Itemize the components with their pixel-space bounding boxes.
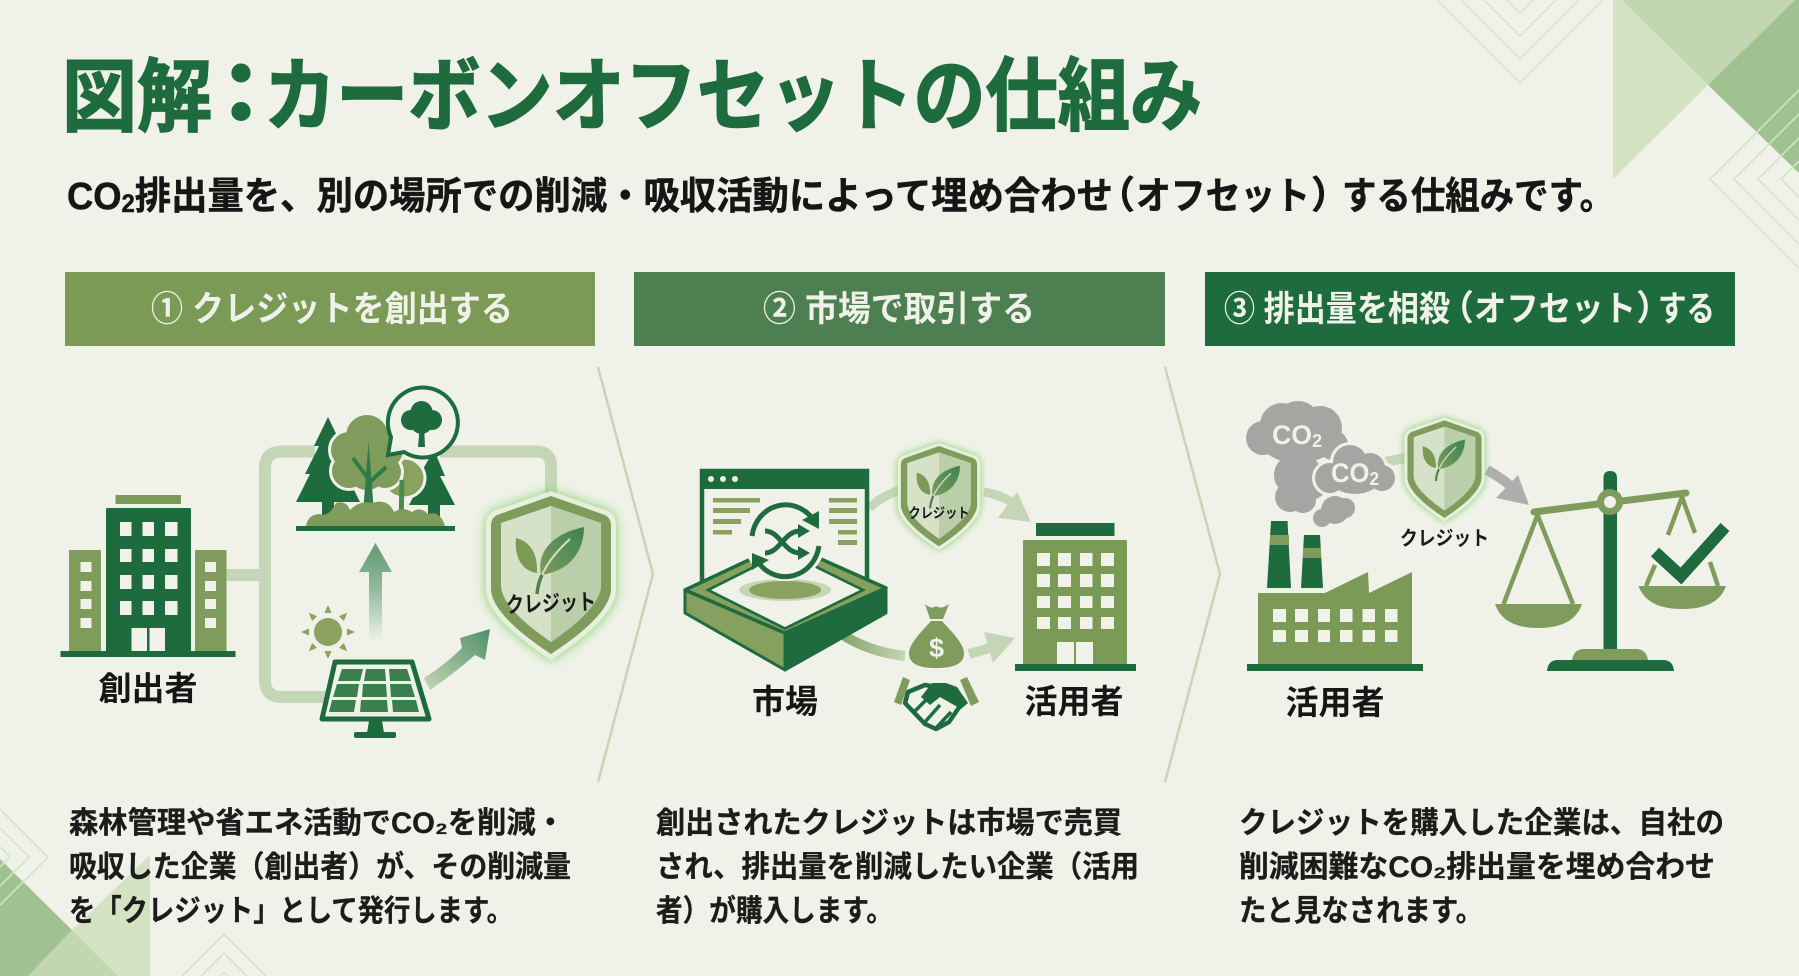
label: credit: クレジット bbox=[1400, 527, 1489, 550]
connector pipes bbox=[226, 452, 551, 697]
text block: step 2 description: 者）が購入します。 bbox=[656, 894, 893, 928]
step header 2: ② 市場で取引する bbox=[763, 290, 1035, 329]
icon: browser window bbox=[700, 469, 869, 596]
icon: credit shield bbox=[1404, 417, 1485, 522]
icon: credit shield large bbox=[486, 491, 616, 660]
text block: step 3 description: クレジットを購入した企業は、自社の bbox=[1239, 807, 1724, 840]
text block: step 1 description: を「クレジット」として発行します。 bbox=[69, 895, 513, 928]
icon: smoke clouds: 2 bbox=[1369, 469, 1379, 489]
icon: handshake bbox=[894, 677, 979, 729]
text block: step 1 description bbox=[69, 807, 571, 928]
text block: step 2 description: 創出されたクレジットは市場で売買 bbox=[656, 807, 1122, 840]
connector: cloud to shield bbox=[1385, 458, 1405, 462]
arrow: bag to user bbox=[969, 632, 1015, 663]
subtitle bbox=[67, 175, 1614, 218]
icon: factory bbox=[1247, 521, 1423, 671]
step header 3: ③ 排出量を相殺 bbox=[1224, 290, 1450, 329]
icon: credit shield: クレジット bbox=[908, 505, 970, 521]
icon: exchange circle bbox=[744, 499, 826, 581]
divider arrow 2 bbox=[1165, 367, 1220, 782]
panel: step 1 illustration bbox=[60, 388, 616, 738]
text block: step 3 description bbox=[1239, 807, 1724, 928]
icon: solar panel bbox=[322, 662, 429, 738]
step header 3 bbox=[1205, 272, 1735, 346]
subtitle: 2 bbox=[122, 190, 135, 218]
step header 1: ① クレジットを創出する bbox=[151, 290, 513, 329]
arrow: solar to forest bbox=[359, 543, 392, 642]
subtitle: CO bbox=[67, 176, 124, 218]
arrow: market payment to bag bbox=[843, 635, 905, 656]
title: カーボンオフセットの仕組み bbox=[264, 52, 1202, 141]
text block: step 2 description: され、排出量を削減したい企業（活用 bbox=[656, 851, 1139, 884]
icon: money bag: $ bbox=[929, 633, 944, 663]
icon: credit shield large: クレジット bbox=[506, 589, 596, 618]
step header 3: ） bbox=[1636, 289, 1671, 328]
step header 3: する bbox=[1658, 290, 1715, 329]
label: user: 活用者 bbox=[1024, 683, 1124, 720]
subtitle: ） bbox=[1311, 175, 1349, 217]
icon: tree bubble bbox=[388, 388, 458, 458]
arrow: credit to scale bbox=[1487, 470, 1529, 505]
text block: step 3 description: 削減困難なCO₂排出量を埋め合わせ bbox=[1239, 851, 1715, 884]
arrow: solar to credit bbox=[424, 629, 490, 690]
subtitle: オフセット bbox=[1136, 176, 1310, 218]
arrow: market to credit bbox=[869, 490, 900, 508]
icon: smoke clouds: CO bbox=[1331, 458, 1372, 488]
step header 3: （ bbox=[1439, 289, 1474, 328]
step header 1 bbox=[65, 272, 595, 346]
label: creator: 創出者 bbox=[98, 670, 198, 707]
icon: smoke clouds bbox=[1246, 401, 1395, 527]
icon: smoke clouds: CO bbox=[1272, 420, 1312, 450]
decoration: bottom left triangles bbox=[0, 809, 266, 976]
arrow: credit to user bbox=[984, 492, 1031, 522]
step header 2 bbox=[634, 272, 1165, 346]
icon: credit shield bbox=[898, 443, 980, 550]
icon: forest bbox=[296, 415, 455, 531]
text block: step 1 description: 吸収した企業（創出者）が、その削減量 bbox=[69, 850, 571, 884]
icon: balance scale bbox=[1495, 471, 1726, 671]
subtitle: する仕組みです。 bbox=[1342, 176, 1614, 218]
title: ： bbox=[201, 50, 281, 139]
icon: smoke clouds: 2 bbox=[1312, 431, 1322, 451]
label: user: 活用者 bbox=[1286, 684, 1384, 721]
text block: step 2 description bbox=[656, 807, 1139, 928]
text block: step 1 description: 森林管理や省エネ活動でCO₂を削減・ bbox=[69, 807, 565, 840]
icon: sun bbox=[301, 605, 355, 659]
panel: step 3 illustration bbox=[1246, 401, 1726, 721]
decoration: top right triangles bbox=[1437, 0, 1799, 268]
icon: creator building bbox=[60, 495, 236, 657]
icon: user building bbox=[1015, 523, 1136, 671]
divider arrow 1 bbox=[598, 367, 653, 782]
subtitle: 排出量を、別の場所での削減・吸収活動によって埋め合わせ bbox=[135, 176, 1113, 218]
title: 図解 bbox=[62, 53, 212, 142]
subtitle: （ bbox=[1097, 175, 1135, 217]
label: market: 市場 bbox=[752, 683, 818, 720]
text block: step 3 description: たと見なされます。 bbox=[1239, 895, 1483, 928]
icon: market platform bbox=[685, 543, 886, 670]
panel: step 2 illustration bbox=[685, 443, 1136, 729]
step header 3: オフセット bbox=[1474, 290, 1636, 329]
icon: money bag bbox=[909, 604, 964, 668]
